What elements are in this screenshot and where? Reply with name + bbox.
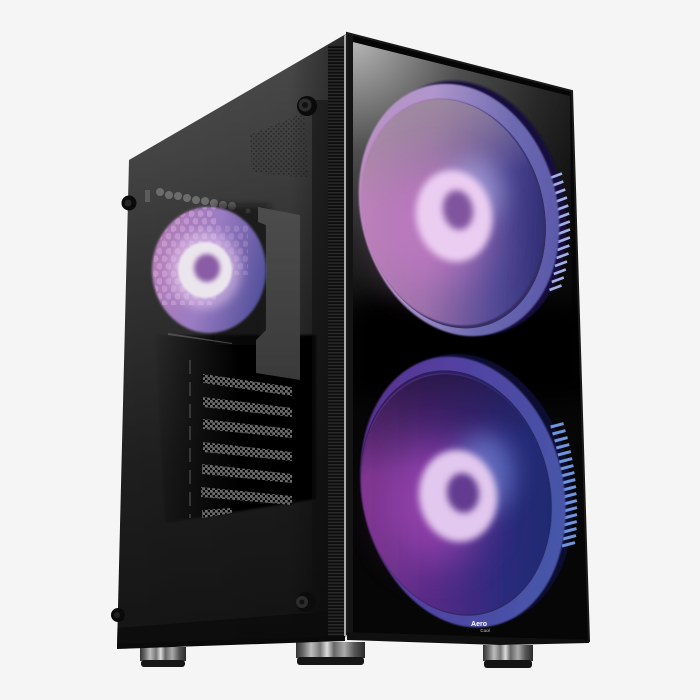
fan ring [359,356,567,628]
fan disc [360,98,544,326]
logo [471,621,490,633]
screw: bottom right [296,592,316,612]
foot: middle [296,642,365,665]
slot row 2 [203,397,292,417]
dark rear column [312,100,328,350]
fan shadow [424,352,574,622]
slot row 7 [202,508,232,518]
fan glow [388,444,484,564]
fan glow [384,168,488,288]
feet [140,642,533,668]
fan disc edge [360,370,552,616]
upper fan [358,80,570,338]
fan disc top sheen [362,100,526,184]
fan hub centre [440,188,476,232]
grey side bar [256,207,300,380]
illustration: tower PC case [111,32,590,668]
panel: glass side [110,30,350,655]
upper rear vent [250,112,308,178]
foot: left [140,647,186,667]
slot row 1 [203,374,292,396]
fan hub ring [413,445,503,547]
fan glow blue [454,434,514,514]
fan fins [550,174,570,290]
silver edge strip [344,33,348,638]
lower fan [359,352,578,632]
fan fins [551,424,577,546]
faint lines below fan [168,333,232,344]
logo: Cool [480,628,490,633]
fan hub ring [409,164,499,268]
logo: Aero [471,621,487,628]
fan glow blue [446,160,502,224]
fan hub centre [444,471,482,515]
bottom front lip [347,632,589,645]
fan disc [360,372,552,615]
fan disc edge [378,100,546,328]
dark backing around side fan [215,205,270,345]
fan shadow [414,80,568,336]
front left frame [348,34,353,632]
slot row 4 [203,442,292,461]
slot row 5 [202,464,292,483]
screw: top right [297,96,317,116]
panel: front glass [348,34,588,640]
fan disc top shade [362,374,526,468]
slot row 6 [201,487,292,505]
side fan [150,205,266,333]
front panel outline [347,33,589,641]
slot row 3 [203,419,292,438]
mesh strip [328,45,344,640]
screw: bottom left [111,608,125,622]
side panel bottom edge [117,636,345,649]
row of top vent holes [145,188,250,214]
interior shadow [155,335,316,523]
fan ring [358,82,560,338]
bottom band [117,614,294,644]
expansion slot brackets [189,360,191,518]
foot: right [483,645,533,668]
screw: top left [122,196,136,210]
